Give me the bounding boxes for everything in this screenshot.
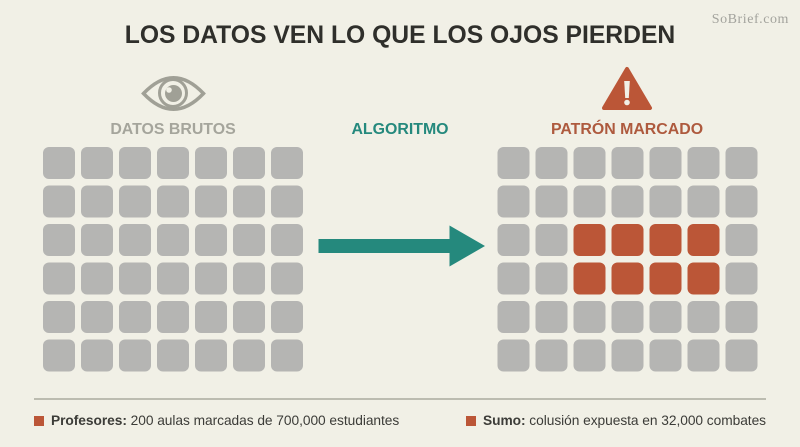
- title: LOS DATOS VEN LO QUE LOS OJOS PIERDEN: [125, 22, 675, 49]
- label: raw data: DATOS BRUTOS: [110, 121, 236, 138]
- brand watermark: SoBrief.com: [712, 12, 789, 27]
- label: flagged pattern: PATRÓN MARCADO: [551, 121, 703, 138]
- legend: teachers: Profesores: 200 aulas marcadas de 700,000 estudiantes: [51, 413, 399, 428]
- flagged pattern grid: [498, 147, 758, 372]
- arrow: [318, 226, 485, 266]
- icon: warning triangle: [602, 66, 652, 110]
- raw data grid: [43, 147, 303, 372]
- legend: sumo: Sumo: colusión expuesta en 32,000 combates: [483, 413, 766, 428]
- label: algorithm: ALGORITMO: [351, 121, 449, 138]
- icon: eye: [141, 76, 206, 111]
